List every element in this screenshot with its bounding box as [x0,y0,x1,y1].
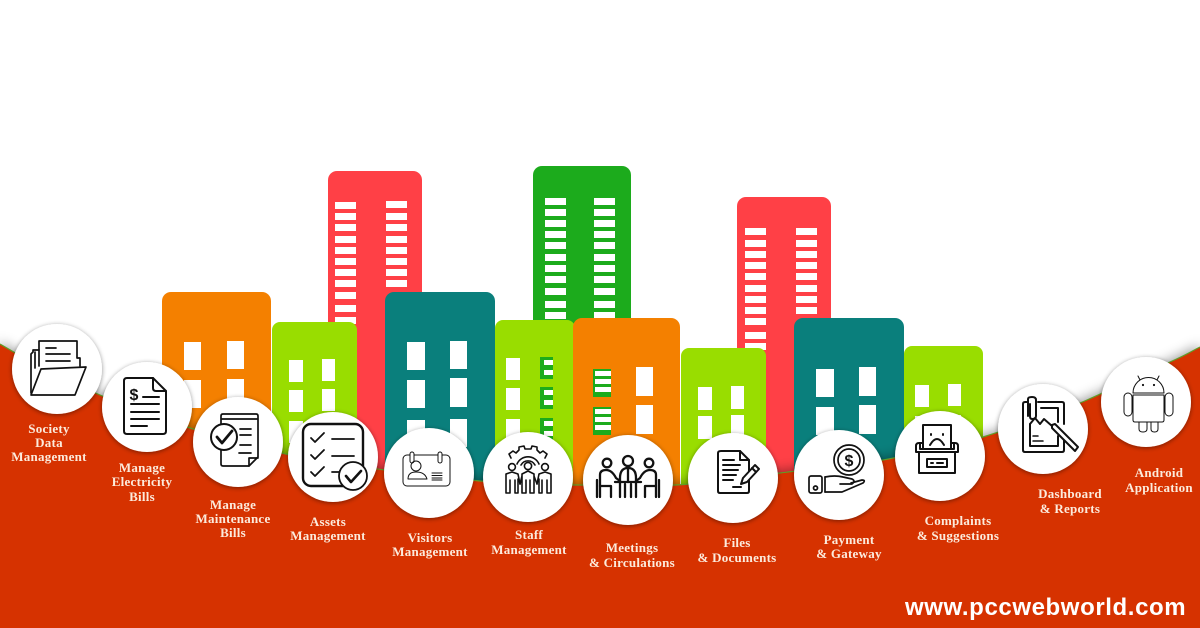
circle badge [794,430,884,520]
building: lime 3 [681,348,766,498]
building: green tower [533,166,631,506]
label: Payment [824,532,875,547]
label [491,527,567,557]
label: & Circulations [589,555,675,570]
label: Dashboard [1038,486,1102,501]
feature: manage maintenance bills [193,397,283,540]
circle badge [12,324,102,414]
label [589,540,675,570]
feature: manage electricity bills [102,362,192,504]
icon: clipboard with pen [1023,397,1078,452]
icon: coin over hand: $ [845,453,854,470]
label: Management [290,528,366,543]
building: red tower right [737,197,831,507]
label: Bills [129,489,155,504]
label: Complaints [925,513,991,528]
circle badge [583,435,673,525]
circle badge [998,384,1088,474]
feature: payment and gateway [794,430,884,561]
circle badge [102,362,192,452]
label: Manage [119,460,165,475]
feature: complaints and suggestions [895,411,999,543]
label [698,535,776,565]
label [917,513,999,543]
label: Society [28,421,70,436]
feature: dashboard and reports [998,384,1102,516]
building: orange right [573,318,680,498]
label [816,532,882,561]
icon: gear and staff [506,446,551,493]
label [112,460,172,504]
icon: folder with papers [31,341,86,395]
icon: complaint box [916,425,958,473]
label [11,421,87,464]
label: Electricity [112,474,172,489]
circle badge [483,432,573,522]
label: Bills [220,525,246,540]
label: Management [11,449,87,464]
label: Visitors [408,530,452,545]
circle badge [193,397,283,487]
label: Data [35,435,63,450]
label [1038,486,1102,516]
circle badge [288,412,378,502]
building: red tower left [328,171,422,511]
label: Android [1135,465,1184,480]
building: teal right [794,318,904,488]
website url: www.pccwebworld.com [904,594,1186,621]
circle badge [895,411,985,501]
icon: checked document [211,414,258,466]
icon: id card [403,452,450,486]
building: teal left [385,292,495,492]
icon: bill: $ [130,387,139,404]
label: Staff [515,527,543,542]
panel: red wave ground [0,344,1200,628]
label: Application [1125,480,1193,495]
icon: android robot [1124,376,1173,432]
circle badge [688,433,778,523]
label: Maintenance [196,511,270,526]
feature: staff management [483,432,573,557]
label: & Reports [1040,501,1100,516]
feature: files and documents [688,433,778,565]
label: Management [392,544,468,559]
building: lime 2 [495,320,575,500]
feature: android application [1101,357,1193,495]
circle badge [384,428,474,518]
icon: bill [124,378,166,434]
label [392,530,468,559]
label: Meetings [606,540,658,555]
label [196,497,270,540]
icon: document and pen [718,451,759,493]
label: Files [723,535,751,550]
building: orange left [162,292,271,492]
feature: assets management [288,412,378,543]
label: & Documents [698,550,776,565]
icon: meeting people [597,456,659,497]
feature: society data management [11,324,102,464]
label: & Gateway [816,546,882,561]
building: lime 1 [272,322,357,502]
feature: meetings and circulations [583,435,675,570]
building: lime 4 [904,346,983,476]
label: Manage [210,497,256,512]
label: Management [491,542,567,557]
icon: checklist [303,424,367,490]
buildings skyline [162,166,983,511]
label [290,514,366,543]
label [1125,465,1193,495]
label: Assets [310,514,346,529]
circle badge [1101,357,1191,447]
label: & Suggestions [917,528,999,543]
feature: visitors management [384,428,474,559]
